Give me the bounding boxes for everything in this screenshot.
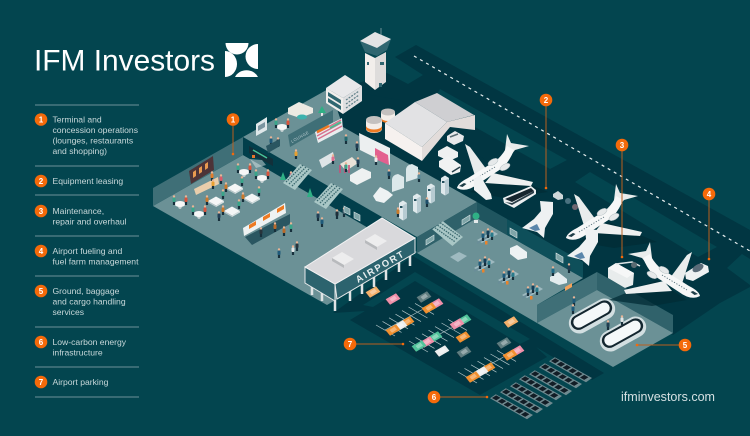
restaurant counter	[189, 156, 222, 195]
callout 1	[227, 113, 239, 155]
escalator	[314, 183, 343, 209]
website: ifminvestors.com	[621, 389, 715, 404]
legend item 5: and cargo handling	[52, 296, 126, 306]
legend item 3: repair and overhaul	[52, 216, 127, 226]
legend item 1: 1	[39, 116, 44, 124]
solar panel array	[490, 357, 592, 419]
logo	[34, 43, 258, 78]
jet bridge	[522, 201, 553, 238]
legend item 3: Maintenance,	[52, 206, 104, 216]
aircraft boarding stairs	[474, 175, 492, 200]
legend item 5: 5	[39, 287, 44, 296]
callout 2: 2	[544, 96, 549, 105]
legend item 1: concession operations	[52, 125, 138, 135]
gate seating	[450, 228, 572, 300]
callout 1: 1	[231, 116, 236, 124]
callout 6: 6	[432, 393, 437, 402]
legend item 5: services	[52, 307, 84, 317]
airliner	[457, 134, 548, 198]
office building	[326, 75, 362, 114]
check-in desks	[218, 203, 292, 245]
legend item 7: 7	[39, 378, 44, 387]
indoor trees	[280, 172, 480, 223]
callout 5: 5	[683, 341, 688, 350]
callout 3: 3	[620, 141, 625, 150]
legend item 6: Low-carbon energy	[52, 337, 127, 347]
security gates	[373, 164, 449, 220]
jet bridge	[567, 229, 598, 266]
cafe tables	[172, 163, 270, 219]
legend item 1: Terminal and	[52, 114, 102, 124]
baggage hall	[537, 272, 673, 367]
maintenance truck	[608, 262, 640, 288]
rooftop unit	[365, 234, 387, 250]
parking bay lines	[376, 303, 516, 383]
callout 3	[616, 139, 628, 258]
legend item 6	[35, 336, 127, 358]
legend item 4	[35, 245, 139, 266]
legend item 4: 4	[39, 247, 44, 256]
callout 4	[703, 188, 715, 260]
escalator	[431, 218, 464, 249]
legend item 2: 2	[39, 177, 44, 186]
legend item 2: Equipment leasing	[52, 176, 123, 186]
terminal main floor	[153, 137, 417, 305]
service vehicles	[438, 131, 464, 175]
baggage carousel	[565, 295, 619, 337]
car park road and lot	[333, 256, 604, 395]
logo mark	[225, 43, 258, 77]
legend item 1: (lounges, restaurants	[52, 136, 133, 146]
legend item 6: infrastructure	[52, 348, 103, 358]
control tower	[360, 28, 391, 90]
baggage carousel	[596, 313, 650, 355]
airliner	[566, 184, 657, 248]
lounge area	[256, 102, 333, 153]
wordmark: IFM Investors	[34, 44, 215, 78]
airliner	[609, 242, 700, 306]
wall screens	[344, 206, 563, 263]
airport terminal building	[305, 218, 415, 311]
rooftop unit	[332, 252, 354, 268]
apron bus	[503, 186, 536, 208]
legend item 2	[35, 175, 123, 187]
terminal upper floor	[243, 88, 500, 253]
callout 2	[540, 94, 552, 189]
legend item 7: Airport parking	[52, 377, 109, 387]
legend	[35, 105, 139, 397]
legend item 1	[35, 113, 138, 156]
legend item 3: 3	[39, 207, 44, 216]
callout 7	[344, 338, 404, 350]
legend item 4: fuel farm management	[52, 256, 139, 266]
callout 5	[636, 339, 691, 351]
legend item 4: Airport fueling and	[52, 246, 122, 256]
legend item 5	[35, 285, 126, 317]
legend item 7	[35, 376, 109, 388]
legend item 5: Ground, baggage	[52, 286, 120, 296]
legend item 1: and shopping)	[52, 146, 107, 156]
callout 7: 7	[348, 340, 353, 349]
escalator	[283, 164, 312, 190]
gate lounge floor	[417, 202, 583, 323]
fuel truck	[685, 262, 709, 281]
baggage hall people	[572, 296, 624, 330]
airport sign: AIRPORT	[354, 248, 407, 286]
hangar	[385, 93, 475, 161]
retail shops	[290, 118, 390, 185]
lounge sign: LOUNGE	[290, 130, 310, 144]
runway and apron	[330, 45, 750, 335]
legend item 3	[35, 205, 127, 226]
parked cars	[366, 286, 524, 384]
wall signage with screen	[249, 146, 273, 168]
passengers near entrance	[278, 207, 346, 258]
callout 4: 4	[707, 190, 712, 199]
legend item 6: 6	[39, 338, 44, 347]
callout 6	[428, 391, 488, 403]
ground equipment	[553, 191, 578, 210]
fuel tanks	[366, 108, 395, 133]
